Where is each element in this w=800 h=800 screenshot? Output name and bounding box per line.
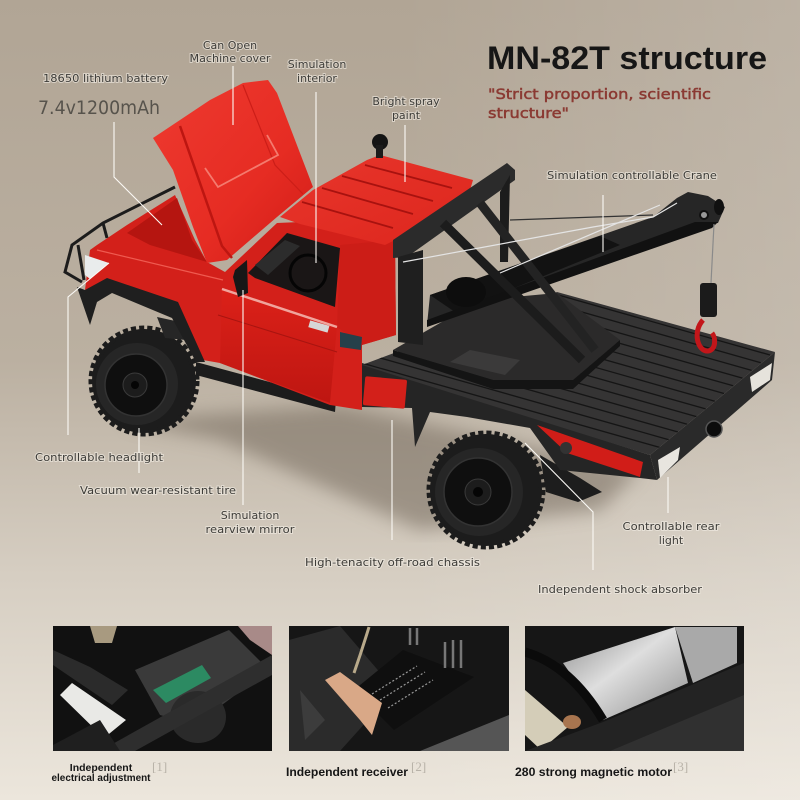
crane hook: [697, 283, 717, 351]
subtitle: structure": [488, 106, 569, 122]
label: battery capacity: 7.4v1200mAh: [38, 97, 160, 119]
photo: motor: [525, 626, 744, 751]
front wheel: [92, 329, 196, 433]
cab and body shell: [85, 195, 396, 410]
door trim and handle: [222, 289, 362, 350]
label: headlight: Controllable headlight: [35, 451, 164, 464]
side mirror: [233, 260, 248, 297]
crane cables: [403, 203, 714, 283]
label: rear light: light: [659, 534, 684, 547]
subtitle: "Strict proportion, scientific: [488, 87, 711, 103]
caption 1: electrical adjustment: [52, 772, 151, 784]
photo: receiver: [289, 626, 509, 751]
caption 3: 280 strong magnetic motor: [515, 767, 673, 779]
caption 1: [1]: [152, 759, 167, 774]
label: rear light: Controllable rear: [622, 520, 720, 533]
truck: [65, 80, 775, 546]
rear suspension arm: [540, 455, 602, 502]
hood: [153, 80, 313, 263]
rear bumper with lights: [650, 352, 775, 480]
label: interior: Simulation: [288, 58, 346, 71]
title: MN-82T structure: [487, 40, 767, 76]
engine bay: [127, 198, 207, 262]
caption 1: Independent: [70, 762, 133, 774]
label: interior: [288, 58, 346, 85]
label: tire: Vacuum wear-resistant tire: [80, 484, 236, 497]
label: mirror: [206, 509, 295, 536]
red side panel: [537, 425, 643, 477]
label: mirror: rearview mirror: [206, 523, 295, 536]
caption 2: Independent receiver: [286, 767, 409, 779]
caption 1: [52, 759, 167, 784]
label: machine cover: [190, 39, 271, 65]
headlight: [85, 255, 109, 279]
label: paint: paint: [392, 109, 421, 122]
label: battery: 18650 lithium battery: [43, 72, 169, 85]
caption 3: [515, 759, 688, 779]
caption 2: [286, 759, 426, 779]
red side marker: [363, 376, 407, 409]
caption 2: [2]: [411, 759, 426, 774]
cab window: [248, 233, 340, 307]
label: shock absorber: Independent shock absorber: [538, 583, 702, 596]
callout leader lines: [68, 66, 668, 570]
snorkel: [372, 134, 388, 158]
crane gantry: [393, 163, 595, 360]
crane boom: [427, 192, 725, 327]
label: rear light: [622, 520, 720, 547]
ground shadow: [120, 405, 640, 530]
wheel arch: [77, 278, 205, 362]
label: chassis: High-tenacity off-road chassis: [305, 556, 480, 569]
label: paint: [372, 95, 440, 122]
label: machine cover: Can Open: [203, 39, 257, 52]
label: interior: interior: [297, 72, 337, 85]
flatbed deck: [363, 292, 775, 455]
flatbed side skirt: [362, 363, 657, 480]
bull bar: [65, 187, 175, 282]
photo: electrical adjustment: [53, 626, 272, 751]
crane base plate: [393, 293, 620, 389]
label: crane: Simulation controllable Crane: [547, 169, 717, 182]
label: mirror: Simulation: [221, 509, 279, 522]
label: paint: Bright spray: [372, 95, 440, 108]
rear wheel: [430, 434, 542, 546]
caption 3: [3]: [673, 759, 688, 774]
winch: [446, 277, 486, 307]
subtitle: [488, 87, 711, 122]
label: machine cover: Machine cover: [190, 52, 271, 65]
chassis rail: [196, 362, 336, 412]
cab roof: [280, 155, 473, 245]
